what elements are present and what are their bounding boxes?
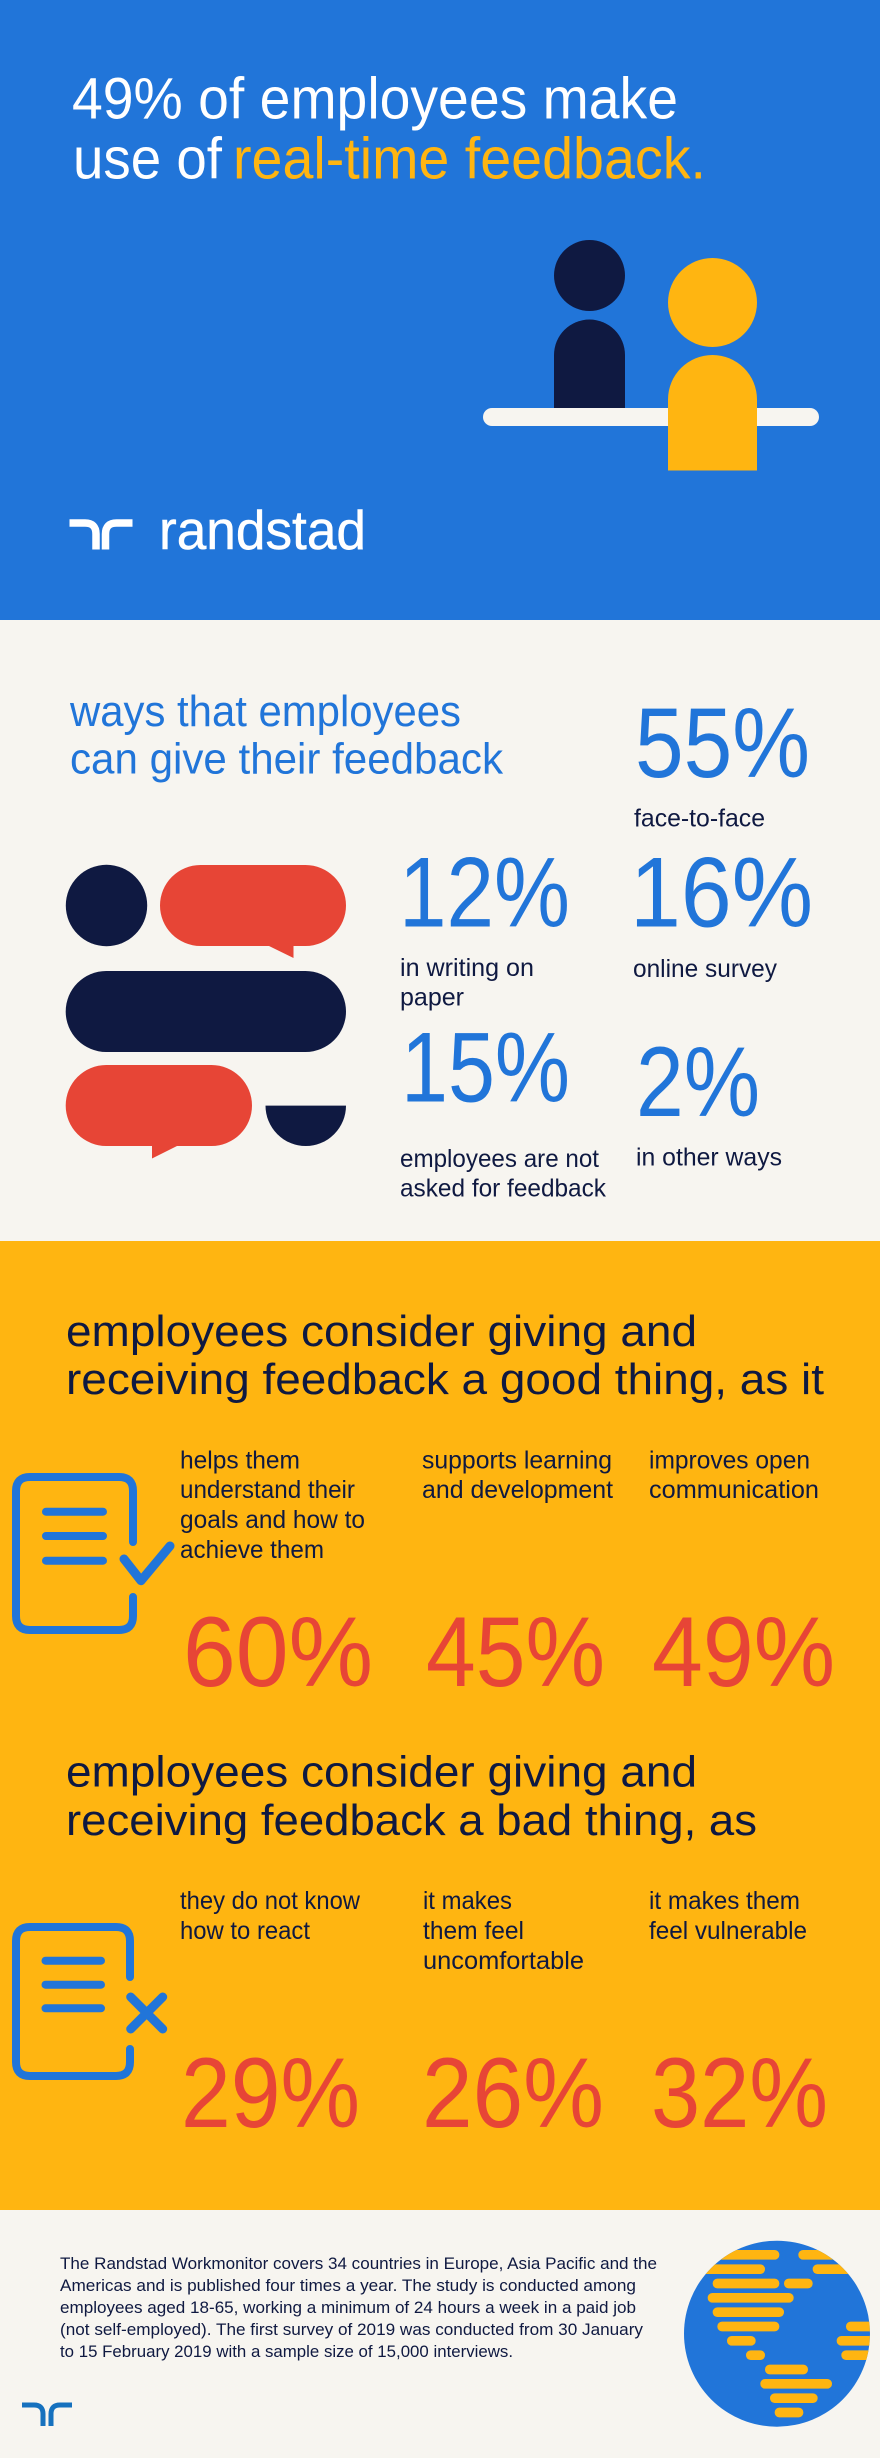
title: real-time feedback. xyxy=(233,126,706,192)
heading: ways that employees can give their feedback: can give their feedback xyxy=(70,734,504,784)
heading: ways that employees can give their feedback xyxy=(69,687,504,784)
icon: document with check mark xyxy=(16,1477,170,1630)
stat: 15% employees are not asked for feedback: asked for feedback xyxy=(400,1174,606,1202)
item: helps them understand their goals, 60%: achieve them xyxy=(180,1536,324,1564)
item: they do not know how to react, 29% xyxy=(180,1887,361,2148)
stat: 55% face-to-face xyxy=(634,687,810,832)
item: it makes them feel uncomfortable, 26%: 26% xyxy=(422,2037,604,2148)
item: helps them understand their goals, 60%: helps them xyxy=(180,1446,300,1474)
stat: 15% employees are not asked for feedback xyxy=(400,1012,606,1202)
text block: methodology note: employees aged 18-65, working a minimum of 24 hours a week in a paid job xyxy=(60,2298,636,2317)
item: helps them understand their goals, 60%: 60% xyxy=(183,1596,373,1707)
panel: good and bad feedback xyxy=(0,1241,880,2210)
heading: bad thing xyxy=(66,1748,757,1845)
stat: 12% in writing on paper: in writing on xyxy=(400,954,534,982)
icon: chat bubbles xyxy=(66,865,346,1158)
panel: hero xyxy=(0,0,880,620)
text block: methodology note: The Randstad Workmonitor covers 34 countries in Europe, Asia Pacific and the xyxy=(60,2254,657,2273)
item: helps them understand their goals, 60%: goals and how to xyxy=(180,1506,365,1534)
item: improves open communication, 49% xyxy=(649,1446,835,1707)
text block: methodology note xyxy=(60,2254,657,2361)
item: improves open communication, 49%: communication xyxy=(649,1476,819,1504)
item: it makes them feel vulnerable, 32% xyxy=(649,1887,828,2148)
panel: ways to give feedback xyxy=(0,620,880,1241)
heading: good thing xyxy=(66,1307,824,1404)
stat: 12% in writing on paper: paper xyxy=(400,984,464,1012)
panel: footer xyxy=(22,2240,870,2427)
stat: 12% in writing on paper: 12% xyxy=(399,836,570,948)
text block: methodology note: Americas and is published four times a year. The study is conducted among xyxy=(60,2276,636,2295)
heading: bad thing: employees consider giving and xyxy=(66,1748,697,1796)
heading: good thing: receiving feedback a good thing, as it xyxy=(66,1355,824,1404)
heading: bad thing: receiving feedback a bad thing, as xyxy=(66,1796,757,1845)
item: supports learning and development, 45% xyxy=(422,1446,613,1707)
stat: 2% in other ways: 2% xyxy=(636,1026,760,1137)
item: it makes them feel uncomfortable, 26%: them feel xyxy=(423,1917,524,1945)
title: use of xyxy=(73,126,223,192)
stat: 55% face-to-face: 55% xyxy=(635,687,810,798)
logo: randstad: randstad xyxy=(159,499,366,561)
item: they do not know how to react, 29%: 29% xyxy=(181,2037,360,2148)
item: helps them understand their goals, 60%: understand their xyxy=(180,1476,355,1504)
stat: 2% in other ways: in other ways xyxy=(636,1144,782,1172)
text block: methodology note: (not self-employed). The first survey of 2019 was conducted from 30 January xyxy=(60,2320,644,2339)
stat: 16% online survey: 16% xyxy=(630,836,813,948)
item: supports learning and development, 45%: and development xyxy=(422,1476,613,1504)
item: it makes them feel vulnerable, 32%: 32% xyxy=(651,2037,828,2148)
item: they do not know how to react, 29%: how to react xyxy=(180,1917,310,1945)
stat: 15% employees are not asked for feedback: employees are not xyxy=(400,1145,599,1173)
stat: 12% in writing on paper xyxy=(399,836,570,1012)
icon: globe xyxy=(684,2241,880,2427)
logo: randstad mark xyxy=(22,2405,72,2426)
item: it makes them feel vulnerable, 32%: feel vulnerable xyxy=(649,1917,807,1945)
icon: two people at a table xyxy=(483,240,819,470)
stat: 16% online survey: online survey xyxy=(633,955,777,983)
icon: document with cross xyxy=(16,1927,163,2076)
logo: randstad xyxy=(70,499,366,561)
item: supports learning and development, 45%: supports learning xyxy=(422,1446,612,1474)
item: it makes them feel uncomfortable, 26%: it makes xyxy=(423,1887,512,1915)
heading: ways that employees can give their feedback: ways that employees xyxy=(69,687,461,736)
stat: 15% employees are not asked for feedback: 15% xyxy=(401,1012,570,1122)
item: supports learning and development, 45%: 45% xyxy=(426,1596,605,1707)
text block: methodology note: to 15 February 2019 with a sample size of 15,000 interviews. xyxy=(60,2342,513,2361)
item: helps them understand their goals, 60% xyxy=(180,1446,373,1707)
item: improves open communication, 49%: improves open xyxy=(649,1446,810,1474)
title: 49% of employees make xyxy=(72,66,678,132)
stat: 55% face-to-face: face-to-face xyxy=(634,804,765,832)
item: it makes them feel uncomfortable, 26%: uncomfortable xyxy=(423,1947,584,1975)
item: it makes them feel uncomfortable, 26% xyxy=(422,1887,604,2148)
item: it makes them feel vulnerable, 32%: it makes them xyxy=(649,1887,800,1915)
item: they do not know how to react, 29%: they do not know xyxy=(180,1887,361,1915)
item: improves open communication, 49%: 49% xyxy=(652,1596,835,1707)
title xyxy=(72,66,706,192)
heading: good thing: employees consider giving and xyxy=(66,1307,697,1356)
